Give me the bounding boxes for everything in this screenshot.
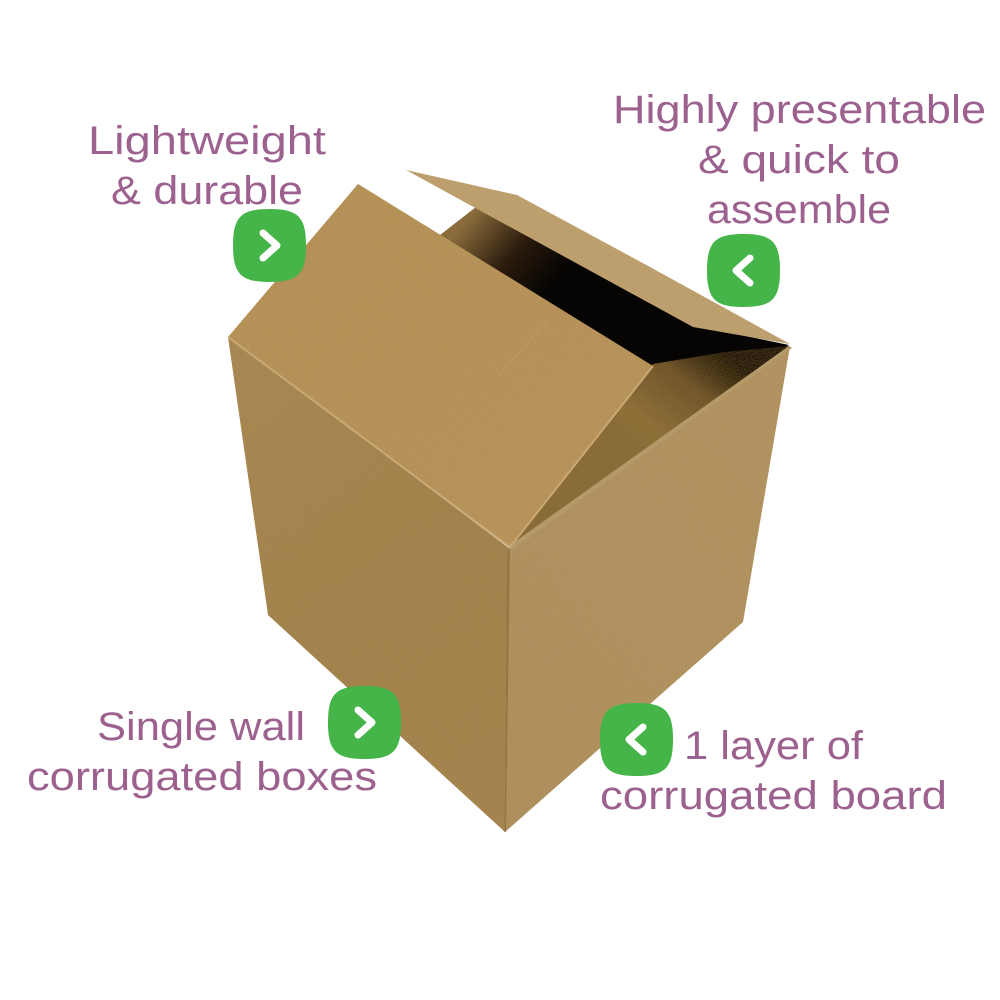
flap lit edges — [228, 337, 653, 547]
label: one layer of corrugated board: corrugated board — [600, 774, 947, 818]
inner side flap — [512, 346, 789, 546]
box right face — [505, 346, 790, 832]
vertical corner edge — [504, 550, 510, 832]
label: single wall corrugated boxes: corrugated boxes — [27, 755, 377, 799]
box interior cavity — [440, 207, 789, 380]
icon: left chevron badge, one layer — [600, 703, 673, 776]
front top flap — [228, 184, 653, 547]
label: one layer of corrugated board — [600, 724, 947, 818]
label: highly presentable and quick to assemble: Highly presentable — [613, 88, 986, 132]
label: highly presentable and quick to assemble: & quick to — [698, 138, 900, 182]
folded edge of right side flap — [509, 346, 792, 550]
label: one layer of corrugated board: 1 layer of — [684, 724, 864, 768]
label: single wall corrugated boxes — [27, 705, 377, 799]
icon: right chevron badge, single wall — [328, 686, 401, 759]
back flap — [406, 170, 790, 344]
label: lightweight and durable: Lightweight — [88, 119, 326, 163]
label: highly presentable and quick to assemble: assemble — [707, 188, 891, 232]
cardboard box — [228, 170, 792, 832]
label: single wall corrugated boxes: Single wall — [97, 705, 305, 749]
icon: left chevron badge, presentable — [707, 234, 780, 307]
label: lightweight and durable — [88, 119, 326, 213]
label: highly presentable and quick to assemble — [613, 88, 986, 232]
icon: right chevron badge, lightweight — [233, 209, 306, 282]
flap crease — [498, 320, 548, 376]
box left face — [228, 337, 509, 832]
label: lightweight and durable: & durable — [111, 169, 303, 213]
